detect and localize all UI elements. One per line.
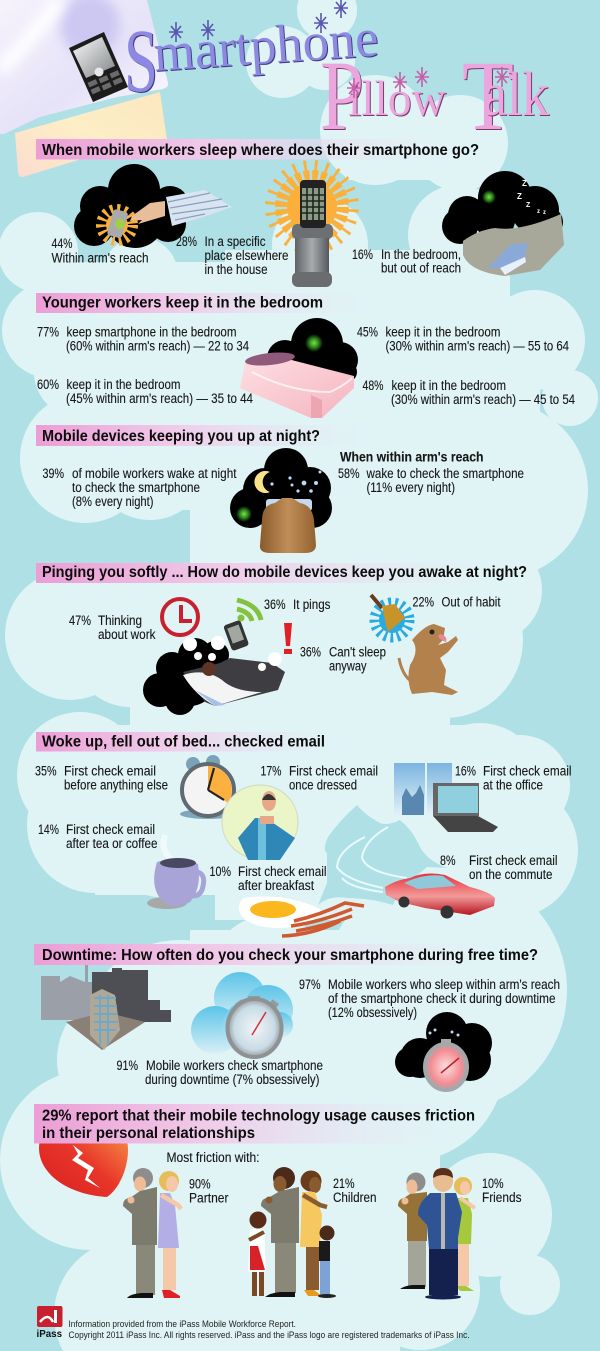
heading: Woke up, fell out of bed... checked email [42,734,325,750]
text: 97%: 97% [299,977,320,992]
text: 10%: First check email [238,864,326,879]
icon: phone asleep under pillow: z [543,210,546,216]
icon: red clock [162,599,198,635]
icon: exclamation mark [284,623,292,654]
heading: When mobile workers sleep where does their smartphone go? [42,142,479,159]
text: 28% specific place: In a specific [204,234,266,249]
text: 77%: (60% within arm's reach) — 22 to 34 [66,339,249,354]
text: 47% thinking about work: about work [98,627,156,642]
heading: 29% report that their mobile technology usage causes friction [42,1108,475,1125]
text: 14%: First check email [66,822,155,837]
text: 60%: 60% [37,377,59,392]
title: illow [348,70,446,126]
text: when within arm's reach: 58% [338,466,360,481]
text: 77%: 77% [37,325,59,340]
text: 35%: before anything else [64,778,168,793]
text: 16%: First check email [483,764,572,779]
title: S [125,13,159,112]
text: 16% [455,764,572,793]
text: 14% [38,822,158,851]
text: 36% can't sleep: Can't sleep [329,645,386,660]
text: 10% friends [482,1176,522,1205]
title: alk [484,62,550,130]
text: 16%: 16% [455,764,476,779]
icon: iPhone on pedestal [274,169,350,287]
text: 14%: after tea or coffee [66,836,158,851]
footer text [68,1319,470,1341]
text: when within arm's reach: wake to check the smartphone [366,466,524,481]
text: 39%: of mobile workers wake at night [72,466,237,481]
panel: pinging you softly [36,563,536,715]
text: 44% within arm's reach: Within arm's reach [52,250,148,266]
text: 21% children: Children [333,1190,376,1205]
text: 36% it pings: 36% [264,597,286,612]
title: martphone [152,7,380,83]
text: 90% partner: 90% [189,1177,210,1192]
text: 28% specific place [176,234,288,277]
text: 39%: to check the smartphone [72,480,200,495]
text: 36% can't sleep: 36% [300,645,321,660]
text: 8%: on the commute [469,867,552,882]
text: 48%: 48% [362,378,384,393]
text: 90% partner [189,1177,229,1206]
text: 44% within arm's reach: 44% [52,236,72,251]
title: martphone [153,8,381,84]
icon: sleeper in bed with black cloud [143,636,285,715]
teal gap between clouds [318,805,447,905]
panel: younger workers [36,293,575,418]
text: 91%: Mobile workers check smartphone [146,1058,323,1073]
figure: friends group [398,1168,475,1300]
icon: phone asleep under pillow: Z [526,202,531,209]
panel: friction in relationships [34,1104,522,1300]
text: 97%: (12% obsessively) [328,1005,417,1020]
text: 91% [116,1058,323,1087]
text: 48%: keep it in the bedroom [392,378,506,393]
title [124,0,550,152]
text: 16% in the bedroom: but out of reach [381,261,461,276]
text: 35%: 35% [35,764,56,779]
text: 14%: 14% [38,822,59,837]
icon: blue cloud and stopwatch [191,972,293,1057]
text: 22% out of habit [412,595,501,610]
text: 39%: (8% every night) [72,494,154,509]
text: 17%: once dressed [289,778,357,793]
text: 97% [299,977,560,1020]
icon: city skyline [41,965,171,1050]
logo: iPass [36,1306,62,1340]
icon: bed with black cloud [240,318,358,418]
text: 17% [260,764,378,793]
text: 60%: keep it in the bedroom [66,377,180,392]
text: 16% in the bedroom [352,247,461,276]
text: 8% [440,853,558,882]
icon: broken heart [39,1120,128,1197]
text: 17%: 17% [260,764,282,779]
text: 22% out of habit: 22% [412,595,434,610]
text: 45%: 45% [357,325,378,340]
text: 16% in the bedroom: In the bedroom, [381,247,461,262]
text: 28% specific place: in the house [204,262,268,277]
icon: dog [399,624,458,695]
icon: ringing bell [371,595,408,636]
icon: signal dot and phone [223,614,249,651]
text: 47% thinking about work: Thinking [98,613,142,628]
panel: where the smartphone goes [36,139,564,287]
text: 91%: 91% [116,1058,138,1073]
heading: Pinging you softly ... How do mobile devices keep you awake at night? [42,564,527,581]
text: 36% it pings: It pings [293,597,331,612]
icon: phone on pillow [69,32,128,102]
text: 22% out of habit: Out of habit [442,595,501,610]
icon: laptop [433,783,498,832]
text: 60% [37,377,253,406]
text: 45% [357,325,569,354]
text: when within arm's reach: (11% every night) [366,480,455,495]
text: 48% [362,378,575,407]
icon: man dressing [222,785,298,860]
text: 28% specific place: place elsewhere [204,248,288,263]
text: 10% friends: Friends [482,1190,522,1205]
text: 28% specific place: 28% [176,234,197,249]
footer text: Information provided from the iPass Mobile Workforce Report. [68,1319,296,1330]
text: 8%: First check email [469,853,558,868]
text: 97%: of the smartphone check it during downtime [328,991,556,1006]
icon: coffee mug [147,835,204,909]
text: 91%: during downtime (7% obsessively) [145,1072,320,1087]
icon: wifi signal [237,600,261,621]
text: 10% [210,864,326,893]
title: illow [349,71,447,127]
text: 39%: 39% [42,466,64,481]
heading [36,293,396,313]
text: 21% children [333,1176,376,1205]
text: 44% within arm's reach [52,236,148,266]
text: most friction with: Most friction with: [166,1150,260,1165]
text: when within arm's reach [338,450,524,495]
text: 21% children: 21% [333,1176,354,1191]
heading: Downtime: How often do you check your smartphone during free time? [42,947,538,964]
text: 35%: First check email [64,764,156,779]
icon: red car with speed lines [337,827,495,918]
text: when within arm's reach: When within arm's reach [340,450,484,465]
title: T [463,41,515,152]
text: 16% in the bedroom: 16% [352,247,373,262]
text: 8%: 8% [440,853,456,868]
panel: woke up, checked email [35,732,572,936]
text: 10%: after breakfast [238,878,314,893]
heading: Mobile devices keeping you up at night? [42,428,320,445]
panel: keeping you up at night [36,425,524,553]
text: 77%: keep smartphone in the bedroom [66,325,236,340]
text: 77% [37,325,249,354]
text: 90% partner: Partner [189,1191,229,1206]
text: 97%: Mobile workers who sleep within arm's reach [328,977,560,992]
text: 10% friends: 10% [482,1176,504,1191]
title: P [321,41,365,152]
text: 16%: at the office [483,778,543,793]
heading [34,1104,484,1144]
heading [36,425,396,446]
icon: fried egg [239,896,324,928]
icon: phone asleep under pillow: Z [517,192,522,201]
icon: phone asleep under pillow: Z [522,179,527,188]
text: 45%: (30% within arm's reach) — 55 to 64 [386,339,569,354]
text: 60%: (45% within arm's reach) — 35 to 44 [66,391,253,406]
text: 17%: First check email [289,764,378,779]
icon: bacon [282,903,364,936]
title: S [124,12,158,111]
icon: night sky and blanket [230,448,332,553]
icon: office window with silhouettes [394,763,452,815]
heading: in their personal relationships [42,1125,255,1142]
footer text: Copyright 2011 iPass Inc. All rights reserved. iPass and the iPass logo are registered trademarks of iPass Inc. [68,1330,470,1341]
text: 36% can't sleep [300,645,386,674]
figure: family with children [248,1167,336,1298]
text: 45%: keep it in the bedroom [386,325,500,340]
title: T [462,40,514,151]
icon: phone asleep under pillow [442,171,564,276]
icon: alarm clock [180,755,236,819]
text: 10%: 10% [210,864,231,879]
figure: couple back to back [123,1168,181,1298]
heading: Younger workers keep it in the bedroom [42,294,323,312]
text: 47% thinking about work [69,613,156,642]
pillow [0,0,168,177]
panel: downtime [34,944,560,1090]
text: 35% [35,764,168,793]
text: 47% thinking about work: 47% [69,613,91,628]
text: 36% can't sleep: anyway [329,659,367,674]
icon: phone asleep under pillow: z [537,209,540,215]
icon: night cloud with pink stopwatch [395,1012,492,1090]
logo: iPass: iPass [36,1328,62,1340]
title: alk [483,61,549,129]
title: P [320,40,364,151]
text: 36% it pings [264,597,331,612]
text: 39% [42,466,237,509]
icon: hand reaching for phone [74,164,232,248]
